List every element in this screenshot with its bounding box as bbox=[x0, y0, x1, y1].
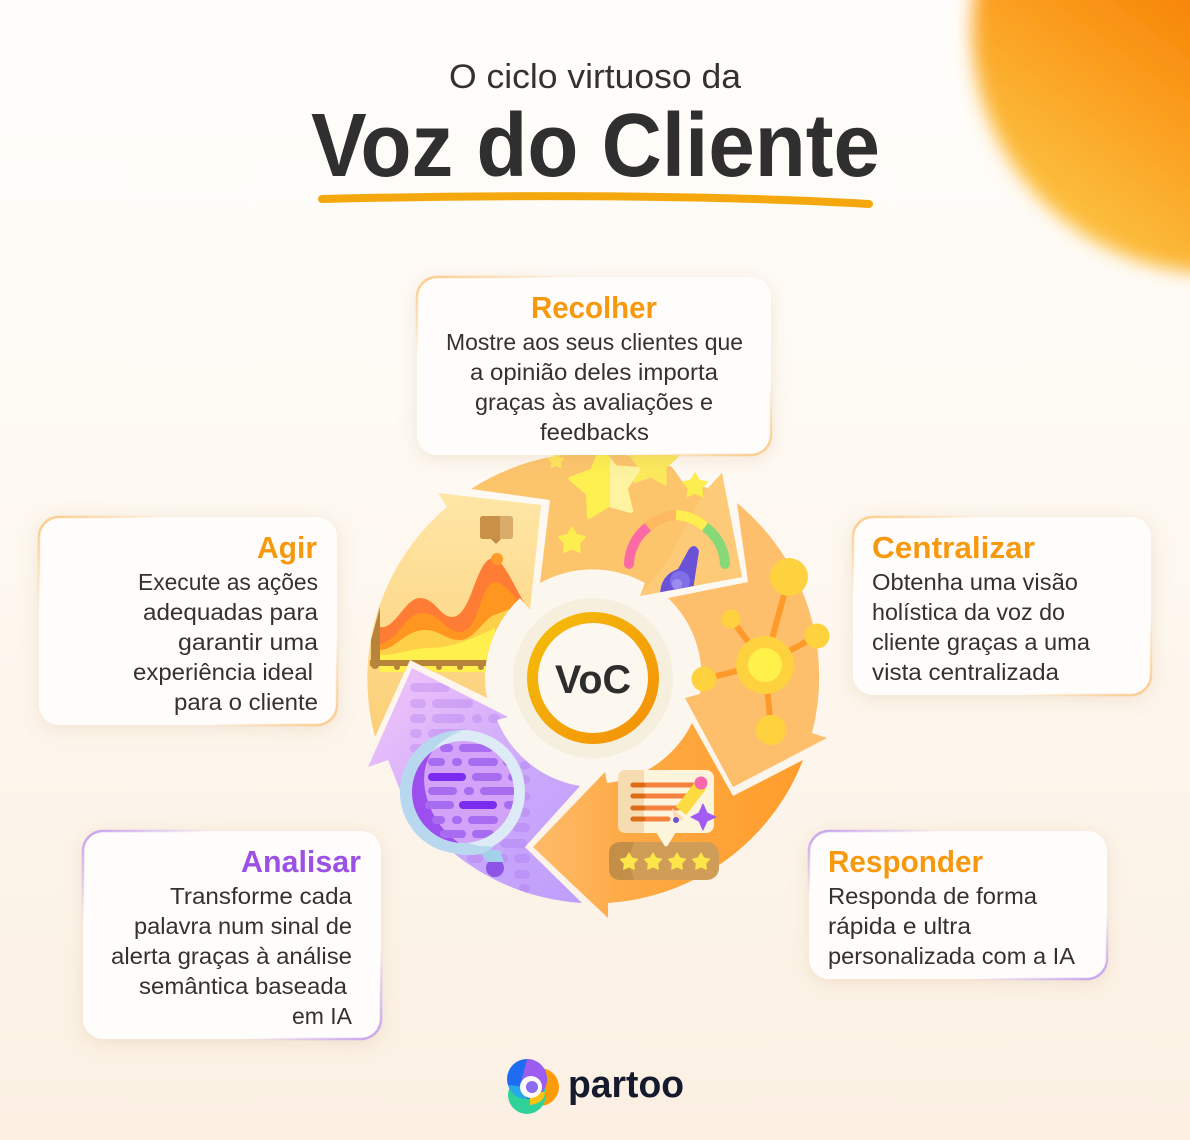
text: Agir body: garantir uma bbox=[178, 629, 318, 655]
icon: speech card with pencil and rating bbox=[609, 770, 719, 880]
text: Centralizar body: cliente graças a uma bbox=[872, 629, 1090, 655]
center disk bbox=[485, 570, 701, 786]
icon: area chart bbox=[370, 558, 530, 672]
main title: Voz do Cliente bbox=[311, 96, 880, 196]
icon: magnifier bbox=[400, 730, 525, 877]
arrow: Analisar bbox=[368, 668, 582, 903]
partoo logo bbox=[507, 1059, 684, 1114]
heading: Recolher: Recolher bbox=[531, 290, 657, 325]
text: Recolher body: feedbacks bbox=[540, 419, 649, 445]
panel: Responder bbox=[809, 831, 1107, 979]
text: Analisar body: palavra num sinal de bbox=[134, 913, 352, 939]
panel: Agir bbox=[39, 517, 337, 725]
text: Recolher body bbox=[446, 329, 743, 445]
text: Centralizar body: vista centralizada bbox=[872, 659, 1059, 685]
text: Recolher body: Mostre aos seus clientes que bbox=[446, 329, 743, 355]
text: Centralizar body bbox=[872, 569, 1090, 685]
text: Analisar body: em IA bbox=[292, 1003, 353, 1029]
decorative orange sun bbox=[972, 0, 1190, 273]
icon: chart peak marker bbox=[480, 516, 513, 565]
text: Analisar body: alerta graças à análise bbox=[111, 943, 352, 969]
arrow: Centralizar bbox=[668, 503, 830, 787]
panel: Analisar bbox=[83, 831, 381, 1039]
title line 1: O ciclo virtuoso da bbox=[449, 58, 741, 96]
text: Responder body bbox=[828, 883, 1076, 969]
arrow: Recolher bbox=[471, 455, 742, 596]
panel: Recolher bbox=[417, 277, 771, 455]
text: Agir body bbox=[133, 569, 318, 715]
text: Centralizar body: holística da voz do bbox=[872, 599, 1065, 625]
arrow: Agir bbox=[367, 493, 541, 737]
text: Agir body: adequadas para bbox=[143, 599, 318, 625]
text: Responder body: rápida e ultra bbox=[828, 913, 971, 939]
text: Recolher body: graças às avaliações e bbox=[475, 389, 713, 415]
arrow: Responder bbox=[533, 723, 803, 918]
text: Agir body: experiência ideal bbox=[133, 659, 313, 685]
background text bars bbox=[410, 683, 530, 893]
icon: gauge needle bbox=[660, 546, 699, 596]
icon: stars bbox=[548, 455, 708, 553]
icon: gauge bbox=[624, 515, 730, 569]
text: Analisar body: semântica baseada bbox=[139, 973, 347, 999]
heading: Analisar: Analisar bbox=[241, 844, 361, 879]
icon: partoo mark bbox=[507, 1059, 559, 1114]
heading: Responder: Responder bbox=[828, 844, 983, 879]
VoC center badge: VoC bbox=[555, 658, 631, 702]
text: Recolher body: a opinião deles importa bbox=[470, 359, 718, 385]
text: Responder body: Responda de forma bbox=[828, 883, 1037, 909]
title underline bbox=[322, 196, 869, 204]
heading: Agir: Agir bbox=[257, 530, 317, 565]
cycle wheel bbox=[367, 434, 830, 918]
heading: Centralizar: Centralizar bbox=[872, 530, 1035, 565]
panel: Centralizar bbox=[853, 517, 1151, 695]
VoC center badge bbox=[513, 598, 673, 758]
title block bbox=[311, 58, 880, 204]
text: Analisar body bbox=[111, 883, 353, 1029]
text: Agir body: Execute as ações bbox=[138, 569, 318, 595]
text: Centralizar body: Obtenha uma visão bbox=[872, 569, 1078, 595]
text: Agir body: para o cliente bbox=[174, 689, 318, 715]
wordmark: partoo bbox=[568, 1064, 684, 1106]
icon: network bbox=[692, 558, 830, 745]
text: Analisar body: Transforme cada bbox=[170, 883, 352, 909]
text: Responder body: personalizada com a IA bbox=[828, 943, 1076, 969]
